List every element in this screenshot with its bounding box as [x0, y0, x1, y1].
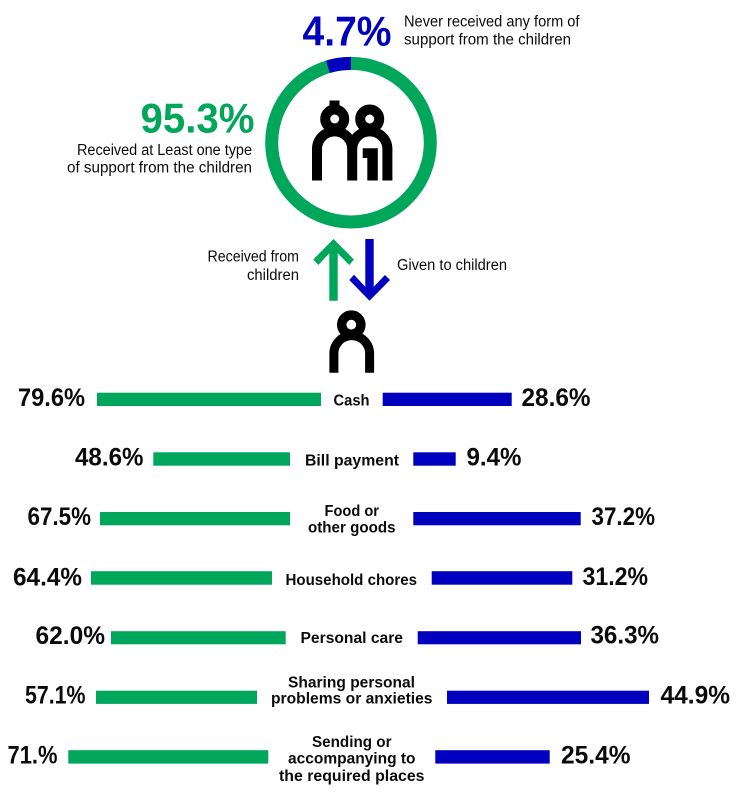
callout: 95.3% received at least one type of support: Received at Least one type [77, 142, 252, 159]
row: personal care: 62.0% [36, 622, 105, 650]
callout: 95.3% received at least one type of support: of support from the children [67, 160, 252, 177]
row: sharing personal problems or anxieties: 57.1% [25, 682, 86, 710]
label: received from children: children [247, 267, 299, 284]
row: cash [18, 384, 590, 412]
row: bill payment [75, 443, 522, 471]
row: personal care: Personal care [300, 630, 403, 647]
row: sharing personal problems or anxieties: Sharing personal [288, 674, 415, 691]
callout: 4.7% never received support: support from the children [404, 32, 571, 48]
label: given to children: Given to children [397, 257, 507, 274]
row: sending or accompanying to the required places [8, 734, 630, 785]
row: household chores [13, 563, 648, 592]
row: food or other goods: 37.2% [592, 503, 655, 531]
row: sending or accompanying to the required places: Sending or [312, 734, 392, 751]
callout: 95.3% received at least one type of support [67, 95, 254, 177]
row: bill payment: Bill payment [305, 452, 399, 469]
row: sending or accompanying to the required places: accompanying to [288, 750, 416, 768]
row: food or other goods: 67.5% [28, 503, 91, 531]
row: sharing personal problems or anxieties: 44.9% [660, 682, 730, 710]
row: sending or accompanying to the required places: the required places [279, 768, 424, 785]
callout: 4.7% never received support: Never received any form of [404, 14, 580, 31]
row: food or other goods: other goods [308, 520, 396, 537]
callout: 4.7% never received support: 4.7% [302, 8, 392, 55]
label: received from children: Received from [208, 249, 299, 266]
row: household chores: Household chores [286, 572, 417, 589]
callout: 95.3% received at least one type of support: 95.3% [140, 95, 254, 142]
row: bill payment: 48.6% [75, 443, 144, 471]
row: cash: Cash [334, 392, 370, 410]
donut chart: 95.3% vs 4.7% [272, 63, 430, 222]
callout: 4.7% never received support [302, 8, 580, 55]
row: cash: 28.6% [522, 384, 590, 412]
row: food or other goods: Food or [324, 503, 379, 520]
row: bill payment: 9.4% [466, 443, 522, 471]
icon: parents with child [317, 100, 387, 180]
icon: older person [334, 315, 370, 373]
row: personal care: 36.3% [590, 622, 659, 650]
row: sharing personal problems or anxieties: problems or anxieties [271, 690, 432, 707]
row: food or other goods [28, 503, 655, 537]
row: household chores: 64.4% [13, 564, 82, 592]
arrow: received from children (up) [313, 239, 354, 301]
row: sending or accompanying to the required places: 25.4% [561, 742, 630, 770]
row: household chores: 31.2% [582, 563, 648, 591]
row: sending or accompanying to the required places: 71.% [8, 742, 58, 770]
label: received from children [208, 249, 299, 284]
row: cash: 79.6% [18, 384, 85, 412]
arrow: given to children (down) [349, 239, 390, 301]
row: sharing personal problems or anxieties [25, 674, 730, 710]
row: personal care [36, 622, 659, 650]
